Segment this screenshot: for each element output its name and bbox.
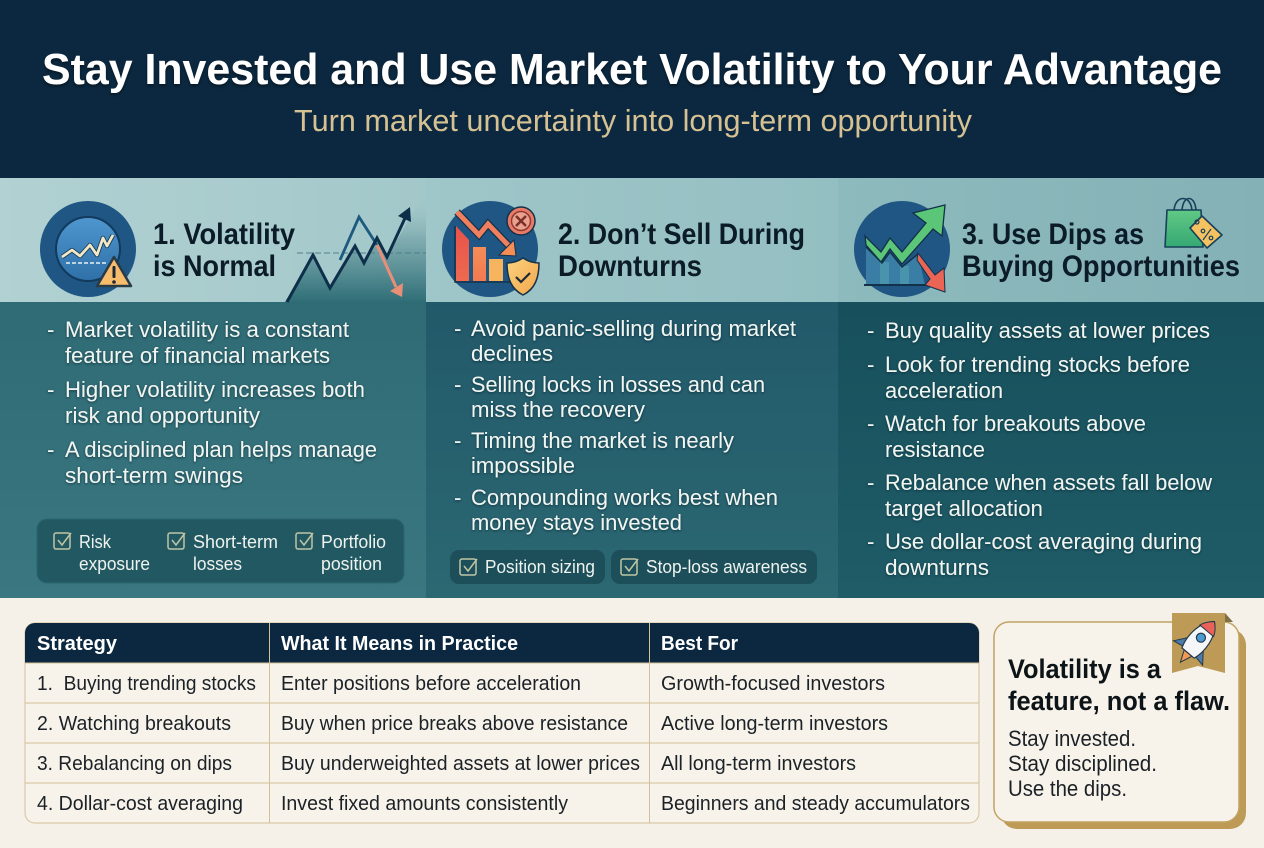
chip: position sizing (450, 550, 605, 584)
bullet list: declines (471, 341, 553, 366)
bullet list (47, 317, 377, 488)
row: dollar-cost averaging: Invest fixed amounts consistently (281, 793, 568, 815)
checkbox: portfolio position: position (321, 554, 382, 574)
panel 1: volatility is normal (0, 178, 426, 598)
row: rebalancing on dips (37, 753, 856, 775)
title: Stay Invested and Use Market Volatility to Your Advantage (42, 45, 1222, 94)
checkbox: risk exposure: exposure (79, 554, 150, 574)
bullet list: - (454, 372, 462, 397)
bullet list: risk and opportunity (65, 403, 261, 428)
bullet list: Rebalance when assets fall below (885, 470, 1213, 495)
bullet list: Selling locks in losses and can (471, 372, 765, 397)
heading: don't sell during downturns (558, 218, 805, 283)
bullet list: short-term swings (65, 463, 243, 488)
bullet list: target allocation (885, 496, 1043, 521)
checklist box (37, 519, 404, 583)
bullet list: money stays invested (471, 510, 682, 535)
bullet list (867, 318, 1213, 580)
ribbon with rocket (1166, 609, 1233, 674)
heading: use dips as buying opportunities: Buying Opportunities (962, 250, 1240, 283)
heading: volatility is normal (153, 218, 295, 283)
bullet list: resistance (885, 437, 985, 462)
bullet list: feature of financial markets (65, 343, 330, 368)
bullet list: - (47, 317, 54, 342)
callout card (994, 609, 1246, 829)
row: dollar-cost averaging (37, 793, 970, 815)
row: buying trending stocks: Enter positions before acceleration (281, 673, 581, 695)
bullet list: - (867, 352, 874, 377)
row: buying trending stocks: Growth-focused investors (661, 673, 885, 695)
checkbox: portfolio position (296, 532, 386, 574)
bullet list: Watch for breakouts above (885, 411, 1146, 436)
callout heading: Volatility is a (1008, 654, 1162, 684)
bullet list: impossible (471, 453, 575, 478)
panel 2: don't sell during downturns (426, 178, 838, 598)
heading: don't sell during downturns: Downturns (558, 250, 702, 283)
bullet list: Market volatility is a constant (65, 317, 350, 342)
row: watching breakouts: Active long-term investors (661, 713, 888, 735)
bullet list: - (454, 485, 462, 510)
bullet list: - (867, 470, 874, 495)
bullet list: Use dollar-cost averaging during (885, 529, 1202, 554)
callout heading: feature, not a flaw. (1008, 686, 1230, 716)
table header row (25, 623, 979, 662)
heading: use dips as buying opportunities: 3. Use Dips as (962, 218, 1144, 251)
chip: stop-loss awareness: Stop-loss awareness (646, 557, 807, 577)
chip: stop-loss awareness (611, 550, 817, 584)
row: dollar-cost averaging: 4. Dollar-cost averaging (37, 793, 243, 815)
strategy table (25, 623, 979, 823)
heading: don't sell during downturns: 2. Don’t Sell During (558, 218, 805, 251)
bullet list: Timing the market is nearly (471, 428, 735, 453)
checkbox: portfolio position: Portfolio (321, 532, 386, 552)
bullet list: - (867, 411, 874, 436)
bullet list: Look for trending stocks before (885, 352, 1190, 377)
subtitle: Turn market uncertainty into long-term opportunity (294, 103, 972, 138)
bullet list: - (867, 529, 874, 554)
heading: volatility is normal: 1. Volatility (153, 218, 295, 251)
icon: volatility gauge with warning (40, 201, 136, 297)
checkbox: short-term losses: Short-term (193, 532, 278, 552)
row: buying trending stocks: 1. Buying trending stocks (37, 673, 256, 695)
bullet list: - (47, 437, 54, 462)
callout text: Use the dips. (1008, 776, 1127, 801)
checkbox: short-term losses (168, 532, 278, 574)
bullet list: Buy quality assets at lower prices (885, 318, 1210, 343)
icon: dip and rebound arrows (854, 201, 950, 297)
bullet list: - (867, 318, 874, 343)
bullet list: miss the recovery (471, 397, 646, 422)
icon: rocket (1166, 609, 1229, 674)
callout text: Stay disciplined. (1008, 751, 1157, 776)
callout text (1008, 726, 1157, 801)
heading: use dips as buying opportunities (962, 218, 1240, 283)
panel 3: use dips as buying opportunities (838, 178, 1264, 598)
checkbox: risk exposure (54, 532, 150, 574)
bullet list: - (454, 428, 462, 453)
row: watching breakouts: 2. Watching breakouts (37, 713, 231, 735)
row: watching breakouts (37, 713, 888, 735)
chart: market line with up and down arrows (285, 190, 426, 302)
row: watching breakouts: Buy when price breaks above resistance (281, 713, 628, 735)
row: dollar-cost averaging: Beginners and steady accumulators (661, 793, 970, 815)
row: rebalancing on dips: Buy underweighted assets at lower prices (281, 753, 640, 775)
bullet list: Higher volatility increases both (65, 377, 365, 402)
table header row: Best For (661, 633, 738, 655)
bullet list: - (454, 316, 462, 341)
icon: falling bars with shield (442, 201, 539, 297)
heading: volatility is normal: is Normal (153, 250, 276, 283)
bullet list: Avoid panic-selling during market (471, 316, 797, 341)
bullet list: acceleration (885, 378, 1003, 403)
icon: shopping bag and price tag (1165, 198, 1222, 248)
callout heading (1008, 654, 1230, 716)
chip: position sizing: Position sizing (485, 557, 595, 577)
bullet list: Compounding works best when (471, 485, 778, 510)
bullet list: downturns (885, 555, 989, 580)
row: rebalancing on dips: All long-term investors (661, 753, 856, 775)
checkbox: short-term losses: losses (193, 554, 242, 574)
table header row: Strategy (37, 633, 118, 655)
callout text: Stay invested. (1008, 726, 1136, 751)
table header row: What It Means in Practice (281, 633, 518, 655)
bullet list (454, 316, 797, 535)
bullet list: - (47, 377, 54, 402)
row: rebalancing on dips: 3. Rebalancing on dips (37, 753, 232, 775)
bullet list: A disciplined plan helps manage (65, 437, 377, 462)
checkbox: risk exposure: Risk (79, 532, 112, 552)
row: buying trending stocks (37, 673, 885, 695)
header band (0, 0, 1264, 178)
